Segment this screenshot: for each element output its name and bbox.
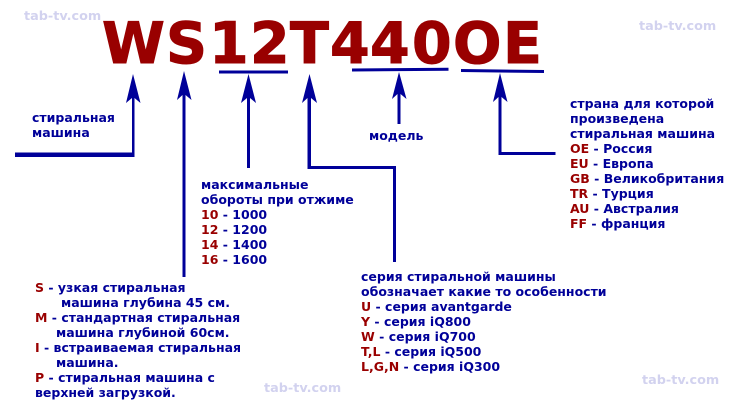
text block: country list: OE - Россия bbox=[570, 141, 652, 156]
arrow: S type bbox=[177, 71, 192, 277]
text block: series list: U - серия avantgarde bbox=[361, 299, 512, 314]
text block: series list: Y - серия iQ800 bbox=[360, 314, 471, 329]
text block: series list: обозначает какие то особенности bbox=[361, 284, 607, 299]
text block: country list: TR - Турция bbox=[570, 186, 654, 201]
watermarks: tab-tv.com bbox=[264, 381, 341, 396]
underline and arrow: country bbox=[461, 69, 556, 155]
text block: spin speed list: 12 - 1200 bbox=[201, 222, 267, 237]
text block: series list: T,L - серия iQ500 bbox=[361, 344, 482, 359]
text block: spin speed list: 16 - 1600 bbox=[201, 252, 267, 267]
text block: spin speed list: 14 - 1400 bbox=[201, 237, 267, 252]
watermarks: tab-tv.com bbox=[642, 373, 719, 388]
underline and arrow: spin speed bbox=[219, 70, 288, 168]
underline and arrow: model bbox=[352, 68, 448, 124]
arrow: W washing machine bbox=[15, 74, 140, 157]
text block: series list: L,G,N - серия iQ300 bbox=[361, 359, 500, 374]
text block: country list: GB - Великобритания bbox=[570, 171, 724, 186]
text block: country list bbox=[570, 96, 724, 231]
text block: country list: стиральная машина bbox=[570, 126, 715, 141]
text block: country list: FF - франция bbox=[570, 216, 665, 231]
text block: country list: произведена bbox=[570, 111, 664, 126]
text block: machine type list: машина. bbox=[56, 355, 119, 370]
text block: machine type list: S - узкая стиральная bbox=[35, 280, 186, 295]
text block: machine type list bbox=[35, 280, 241, 400]
text block: country list: страна для которой bbox=[570, 96, 714, 111]
text block: machine type list: машина глубина 45 см. bbox=[61, 295, 230, 310]
title: model code: WS12T440OE bbox=[102, 11, 542, 77]
text block: machine type list: верхней загрузкой. bbox=[35, 385, 176, 400]
text block: spin speed list: максимальные bbox=[201, 177, 308, 192]
text block: spin speed list: 10 - 1000 bbox=[201, 207, 267, 222]
text block: country list: EU - Европа bbox=[570, 156, 654, 171]
text block: spin speed list: обороты при отжиме bbox=[201, 192, 354, 207]
watermarks: tab-tv.com bbox=[24, 9, 101, 24]
label: washing machine bbox=[32, 110, 115, 140]
text block: series list bbox=[360, 269, 607, 374]
text block: series list: серия стиральной машины bbox=[361, 269, 556, 284]
text block: machine type list: I - встраиваемая стиральная bbox=[35, 340, 241, 355]
text block: spin speed list bbox=[201, 177, 354, 267]
label: washing machine: машина bbox=[32, 125, 90, 140]
watermarks: tab-tv.com bbox=[639, 19, 716, 34]
label: model: модель bbox=[369, 128, 424, 143]
text block: series list: W - серия iQ700 bbox=[361, 329, 476, 344]
label: washing machine: стиральная bbox=[32, 110, 115, 125]
arrow: series bbox=[302, 74, 396, 262]
text block: machine type list: M - стандартная стиральная bbox=[35, 310, 240, 325]
text block: machine type list: P - стиральная машина с bbox=[35, 370, 215, 385]
text block: machine type list: машина глубиной 60см. bbox=[56, 325, 230, 340]
text block: country list: AU - Австралия bbox=[570, 201, 679, 216]
